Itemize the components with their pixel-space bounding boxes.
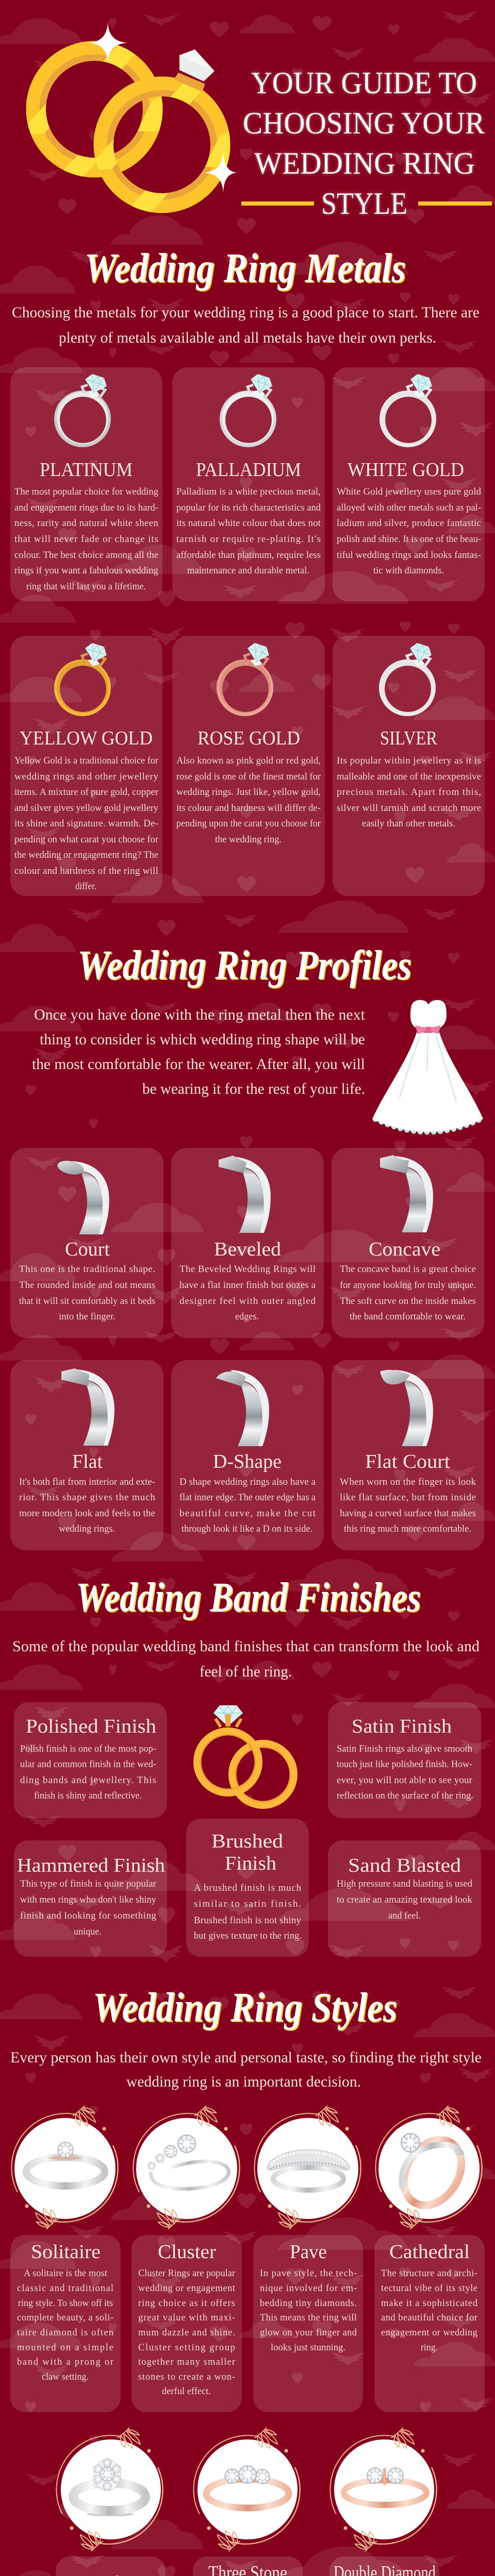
panel: silver <box>333 636 485 896</box>
text: silver description: easily than other metals. <box>362 818 455 829</box>
heading: concave: Concave <box>369 1239 440 1260</box>
heading: flat: Flat <box>72 1451 103 1472</box>
text: platinum description: The most popular choice for wedding <box>14 486 158 497</box>
panel: halo <box>56 2556 166 2576</box>
text: pave description: In pave style, the tech- <box>260 2268 357 2279</box>
heading: d-shape: D-Shape <box>213 1451 282 1472</box>
icon: interlocked gold rings <box>18 21 240 216</box>
text: flat court description: this ring much more comfortable. <box>344 1523 471 1534</box>
text: cathedral description <box>381 2268 478 2353</box>
heading: brushed finish <box>211 1831 283 1874</box>
heading: rose gold: ROSE GOLD <box>197 727 300 749</box>
text: platinum description <box>14 486 159 592</box>
text: solitaire description: A solitaire is the most <box>24 2268 108 2279</box>
text: court description: This one is the traditional shape. <box>19 1264 155 1275</box>
text: pave description: This means the ring will <box>260 2313 357 2323</box>
text: d-shape description: through look it like a D on its side. <box>182 1523 312 1534</box>
text: solitaire description: mounted on a simple <box>17 2343 113 2353</box>
heading: white gold: WHITE GOLD <box>348 459 464 481</box>
text: white gold description: tic with diamonds. <box>373 565 444 576</box>
heading: platinum: PLATINUM <box>40 459 133 481</box>
text: d-shape description: D shape wedding rings also have a <box>179 1477 316 1487</box>
text: satin description: reflection on the surface of the ring. <box>337 1790 473 1801</box>
heading: sand blasted: Sand Blasted <box>348 1855 461 1876</box>
text: court description <box>19 1264 155 1322</box>
text: pave description <box>260 2268 357 2353</box>
text: concave description: for anyone looking for truly unique. <box>340 1280 476 1291</box>
text: flat court description: When worn on the finger its look <box>340 1477 476 1487</box>
icon: white gold ring <box>380 372 436 447</box>
heading: silver: SILVER <box>380 727 438 749</box>
heading: polished finish: Polished Finish <box>26 1716 156 1737</box>
text: solitaire description <box>17 2268 113 2382</box>
intro: profiles: Once you have done with the ring metal then the next <box>34 1006 366 1023</box>
text: rose gold description: Also known as pink gold or red gold, <box>176 755 321 766</box>
text: solitaire description: claw setting. <box>42 2372 89 2382</box>
panel: court <box>10 1148 163 1338</box>
photo: solitaire ring <box>11 2106 118 2229</box>
text: rose gold description: wedding rings. Just like, yellow gold, <box>176 787 321 798</box>
heading: yellow gold: YELLOW GOLD <box>20 727 153 749</box>
panel: pave <box>253 2235 363 2412</box>
heading: wedding ring profiles: Wedding Ring Profiles <box>77 943 411 988</box>
text: sand blasted description <box>337 1878 473 1921</box>
text: palladium description: affordable than platinum, require less <box>176 550 321 561</box>
panel: brushed finish <box>186 1819 309 1957</box>
text: sand blasted description: to create an amazing textured look <box>337 1894 473 1905</box>
text: white gold description: ladium and silver, produce fantastic <box>337 518 481 529</box>
text: court description: into the finger. <box>59 1311 116 1322</box>
text: silver description: malleable and one of the inexpensive <box>337 771 481 782</box>
intro: metals: plenty of metals available and all metals have their own perks. <box>59 329 436 346</box>
heading: brushed finish: Brushed <box>211 1831 283 1852</box>
icon: wedding dress <box>372 1000 483 1132</box>
icon: flat band <box>61 1368 114 1446</box>
intro: metals: Choosing the metals for your wedding ring is a good place to start. There are <box>12 304 480 321</box>
text: pave description: glow on your finger and <box>260 2328 357 2338</box>
text: hammered description: finish and looking for something <box>20 1910 157 1921</box>
photo: pave ring <box>254 2106 361 2229</box>
panel: sand blasted <box>328 1840 481 1957</box>
text: beveled description: have a flat inner finish but oozes a <box>179 1280 316 1291</box>
text: concave description: The soft curve on the inside makes <box>340 1296 476 1307</box>
title: YOUR GUIDE TO <box>251 66 477 100</box>
text: cluster description: wedding or engagement <box>138 2283 236 2294</box>
panel: cathedral <box>374 2235 485 2412</box>
text: d-shape description <box>179 1477 316 1534</box>
text: cluster description: Cluster Rings are popular <box>138 2268 235 2279</box>
icon: interlocked wedding bands with diamond <box>197 1705 294 1805</box>
text: sand blasted description: and feel. <box>388 1910 421 1921</box>
intro: styles: wedding ring is an important decision. <box>126 2073 361 2090</box>
text: yellow gold description: colour and hardness of the ring will <box>14 866 158 876</box>
text: concave description <box>340 1264 476 1322</box>
text: solitaire description: classic and traditional <box>17 2283 113 2294</box>
intro: styles: Every person has their own style and personal taste, so finding the right style <box>10 2049 482 2066</box>
text: yellow gold description: differ. <box>75 881 96 892</box>
text: cluster description: great value with maxi- <box>138 2313 235 2323</box>
text: satin description: ever, you will not able to see your <box>337 1775 473 1786</box>
text: palladium description: Palladium is a white precious metal, <box>176 486 321 497</box>
text: platinum description: colour. The best choice among all the <box>14 550 158 561</box>
text: cluster description: mum dazzle and shine. <box>138 2328 235 2338</box>
text: polished description: ular and common finish in the wed- <box>20 1759 156 1770</box>
text: flat description: more modern look and feels to the <box>19 1508 155 1519</box>
intro: finishes: Some of the popular wedding band finishes that can transform the look and <box>12 1638 480 1655</box>
text: flat description: rior. This shape gives the much <box>19 1492 156 1503</box>
heading: beveled: Beveled <box>214 1239 281 1260</box>
text: solitaire description: band with a prong or <box>17 2357 113 2367</box>
icon: flat court band <box>380 1370 433 1446</box>
text: hammered description: unique. <box>74 1926 102 1937</box>
photo: three stone ring <box>193 2428 300 2551</box>
photo: cathedral ring <box>375 2106 482 2229</box>
panel: beveled <box>171 1148 324 1338</box>
text: brushed description: Brushed finish is not shiny <box>194 1915 301 1926</box>
text: white gold description: polish and shine. It is one of the beau- <box>337 534 481 545</box>
text: pave description: bedding tiny diamonds. <box>260 2298 357 2309</box>
text: pave description: looks just stunning. <box>271 2343 345 2353</box>
text: brushed description: but gives texture to the ring. <box>194 1930 302 1941</box>
panel: cluster <box>131 2235 242 2412</box>
text: yellow gold description: wedding rings and other jewellery <box>14 771 159 782</box>
panel: three stone style <box>193 2556 303 2576</box>
text: white gold description: White Gold jewellery uses pure gold <box>337 486 481 497</box>
photo: halo ring <box>56 2428 163 2551</box>
panel: polished finish <box>14 1702 167 1818</box>
text: satin description <box>337 1743 473 1801</box>
text: satin description: touch just like polished finish. How- <box>337 1759 472 1770</box>
text: cluster description: ring choice as it offers <box>138 2298 235 2309</box>
text: cathedral description: make it a sophisticated <box>381 2298 478 2309</box>
panel: platinum <box>10 367 162 601</box>
text: white gold description <box>337 486 481 576</box>
text: pave description: nique involved for em- <box>260 2283 357 2294</box>
text: silver description: Its popular within jewellery as it is <box>337 755 481 766</box>
text: hammered description: with men rings who don't like shiny <box>20 1894 156 1905</box>
text: palladium description: maintenance and durable metal. <box>187 565 309 576</box>
heading: wedding ring metals: Wedding Ring Metals <box>85 246 406 291</box>
text: beveled description: edges. <box>235 1311 259 1322</box>
intro: profiles: be wearing it for the rest of your life. <box>142 1080 365 1097</box>
heading: court: Court <box>65 1239 110 1260</box>
heading: wedding ring styles: Wedding Ring Styles <box>93 1985 397 2030</box>
text: solitaire description: complete beauty, a soli- <box>17 2313 113 2323</box>
text: platinum description: rings if you want a fabulous wedding <box>14 565 159 576</box>
text: beveled description <box>179 1264 316 1322</box>
text: court description: The rounded inside and out means <box>19 1280 155 1291</box>
intro: styles <box>10 2049 482 2090</box>
text: cluster description: together many smaller <box>138 2357 235 2367</box>
heading: cluster: Cluster <box>158 2241 216 2263</box>
panel: palladium <box>172 367 325 601</box>
heading: solitaire: Solitaire <box>31 2241 101 2263</box>
text: rose gold description: pending upon the carat you choose for <box>176 818 321 829</box>
heading: brushed finish: Finish <box>225 1853 276 1874</box>
text: flat court description: having a curved surface that makes <box>340 1508 476 1519</box>
text: brushed description: similar to satin finish. <box>194 1899 301 1909</box>
text: polished description <box>20 1743 156 1801</box>
panel: concave <box>332 1148 484 1338</box>
text: platinum description: and engagement rings due to its hard- <box>14 502 158 513</box>
text: rose gold description: its colour and hardness will differ de- <box>176 803 321 814</box>
text: beveled description: The Beveled Wedding Rings will <box>179 1264 316 1275</box>
intro: metals <box>12 304 480 346</box>
text: cathedral description: The structure and archi- <box>381 2268 477 2279</box>
text: yellow gold description: the wedding or engagement ring? The <box>14 850 158 860</box>
title: STYLE <box>321 187 407 221</box>
text: yellow gold description <box>14 755 159 892</box>
text: cluster description: derful effect. <box>162 2386 211 2397</box>
text: silver description: precious metals. Apart from this, <box>337 787 481 798</box>
text: rose gold description: rose gold is one of the finest metal for <box>176 771 321 782</box>
text: solitaire description: ring style. To show off its <box>18 2298 113 2309</box>
text: palladium description: its natural white colour that does not <box>176 518 321 529</box>
icon: d-shape band <box>216 1370 269 1446</box>
intro: profiles <box>32 1006 366 1097</box>
text: cathedral description: and beautiful choice for <box>381 2313 477 2323</box>
text: cathedral description: tectural vibe of its style <box>381 2283 477 2294</box>
text: hammered description <box>20 1878 157 1937</box>
icon: palladium ring <box>220 372 276 447</box>
heading: satin finish: Satin Finish <box>352 1716 452 1737</box>
panel: flat <box>10 1360 163 1550</box>
text: rose gold description: the wedding ring. <box>215 834 282 845</box>
text: brushed description <box>194 1883 302 1941</box>
text: yellow gold description: pending on what carat you choose for <box>14 834 159 845</box>
panel: solitaire <box>10 2235 121 2412</box>
icon: silver ring <box>379 641 436 716</box>
text: yellow gold description: its shine and signature. warmth. De- <box>14 818 158 829</box>
text: platinum description: ness, rarity and natural white sheen <box>14 518 159 529</box>
heading: palladium: PALLADIUM <box>196 459 301 481</box>
text: yellow gold description: items. A mixture of pure gold, copper <box>14 787 159 798</box>
heading: cathedral: Cathedral <box>389 2241 470 2263</box>
title: WEDDING RING <box>254 146 475 180</box>
text: silver description: silver will tarnish and scratch more <box>337 803 481 814</box>
text: brushed description: A brushed finish is much <box>194 1883 301 1893</box>
icon: concave band <box>380 1155 433 1232</box>
text: flat court description <box>340 1477 476 1534</box>
panel: yellow gold <box>10 636 162 896</box>
text: satin description: Satin Finish rings also give smooth <box>337 1743 472 1754</box>
heading: pave: Pave <box>290 2241 327 2263</box>
heading: wedding band finishes: Wedding Band Finishes <box>76 1575 421 1620</box>
text: flat description: It's both flat from interior and exte- <box>19 1477 155 1487</box>
icon: yellow gold ring <box>54 641 111 716</box>
text: cathedral description: engagement or wedding <box>381 2328 477 2338</box>
text: flat description: wedding rings. <box>59 1523 115 1534</box>
icon: court band <box>56 1159 109 1234</box>
intro: finishes <box>12 1638 480 1680</box>
text: polished description: ding bands and jewellery. This <box>20 1775 156 1786</box>
photo: double diamond ring <box>330 2428 437 2551</box>
text: d-shape description: flat inner edge. The outer edge has a <box>179 1492 316 1503</box>
text: palladium description <box>176 486 321 576</box>
icon: rose gold ring <box>217 641 273 716</box>
intro: finishes: feel of the ring. <box>200 1663 292 1680</box>
title <box>241 66 492 221</box>
text: white gold description: alloyed with other metals such as pal- <box>337 502 481 513</box>
text: cluster description <box>138 2268 236 2397</box>
text: solitaire description: taire diamond is often <box>17 2328 113 2338</box>
photo: cluster ring <box>133 2106 240 2229</box>
text: polished description: finish is shiny and reflective. <box>34 1790 142 1801</box>
text: concave description: The concave band is a great choice <box>340 1264 476 1275</box>
title: CHOOSING YOUR <box>243 106 485 140</box>
panel: rose gold <box>172 636 325 896</box>
text: palladium description: tarnish or require re-plating. It's <box>176 534 321 545</box>
intro: profiles: thing to consider is which wedding ring shape will be <box>40 1031 365 1048</box>
text: palladium description: popular for its rich characteristics and <box>176 502 321 513</box>
panel: double diamond style <box>329 2556 439 2576</box>
text: d-shape description: beautiful curve, make the cut <box>179 1508 316 1519</box>
text: cathedral description: ring. <box>421 2343 438 2353</box>
heading: flat court: Flat Court <box>365 1451 450 1472</box>
text: cluster description: stones to create a won- <box>138 2372 235 2382</box>
heading: hammered finish: Hammered Finish <box>17 1855 165 1876</box>
text: white gold description: tiful wedding rings and looks fantas- <box>337 550 481 561</box>
text: concave description: the band comfortable to wear. <box>350 1311 466 1322</box>
text: yellow gold description: Yellow Gold is a traditional choice for <box>14 755 159 766</box>
text: court description: that it will sit comfortably as it beds <box>19 1296 155 1307</box>
text: sand blasted description: High pressure sand blasting is used <box>337 1878 472 1889</box>
text: yellow gold description: and silver gives yellow gold jewellery <box>14 803 158 814</box>
text: cluster description: Cluster setting group <box>138 2343 235 2353</box>
panel: hammered finish <box>14 1840 167 1957</box>
icon: beveled band <box>219 1156 271 1233</box>
text: platinum description: that will never fade or change its <box>14 534 158 545</box>
text: hammered description: This type of finish is quite popular <box>20 1878 157 1889</box>
text: flat description <box>19 1477 156 1534</box>
panel: flat court <box>332 1360 484 1550</box>
panel: satin finish <box>328 1702 481 1818</box>
panel: white gold <box>333 367 485 601</box>
text: polished description: Polish finish is one of the most pop- <box>20 1743 156 1754</box>
text: platinum description: ring that will last you a lifetime. <box>26 581 146 592</box>
text: rose gold description <box>176 755 321 845</box>
text: silver description <box>337 755 481 829</box>
panel: d-shape <box>171 1360 324 1550</box>
icon: platinum ring <box>54 372 111 447</box>
text: beveled description: designer feel with outer angled <box>179 1296 316 1307</box>
intro: profiles: the most comfortable for the wearer. After all, you will <box>32 1056 365 1073</box>
text: flat court description: like flat surface, but from inside <box>340 1492 476 1503</box>
